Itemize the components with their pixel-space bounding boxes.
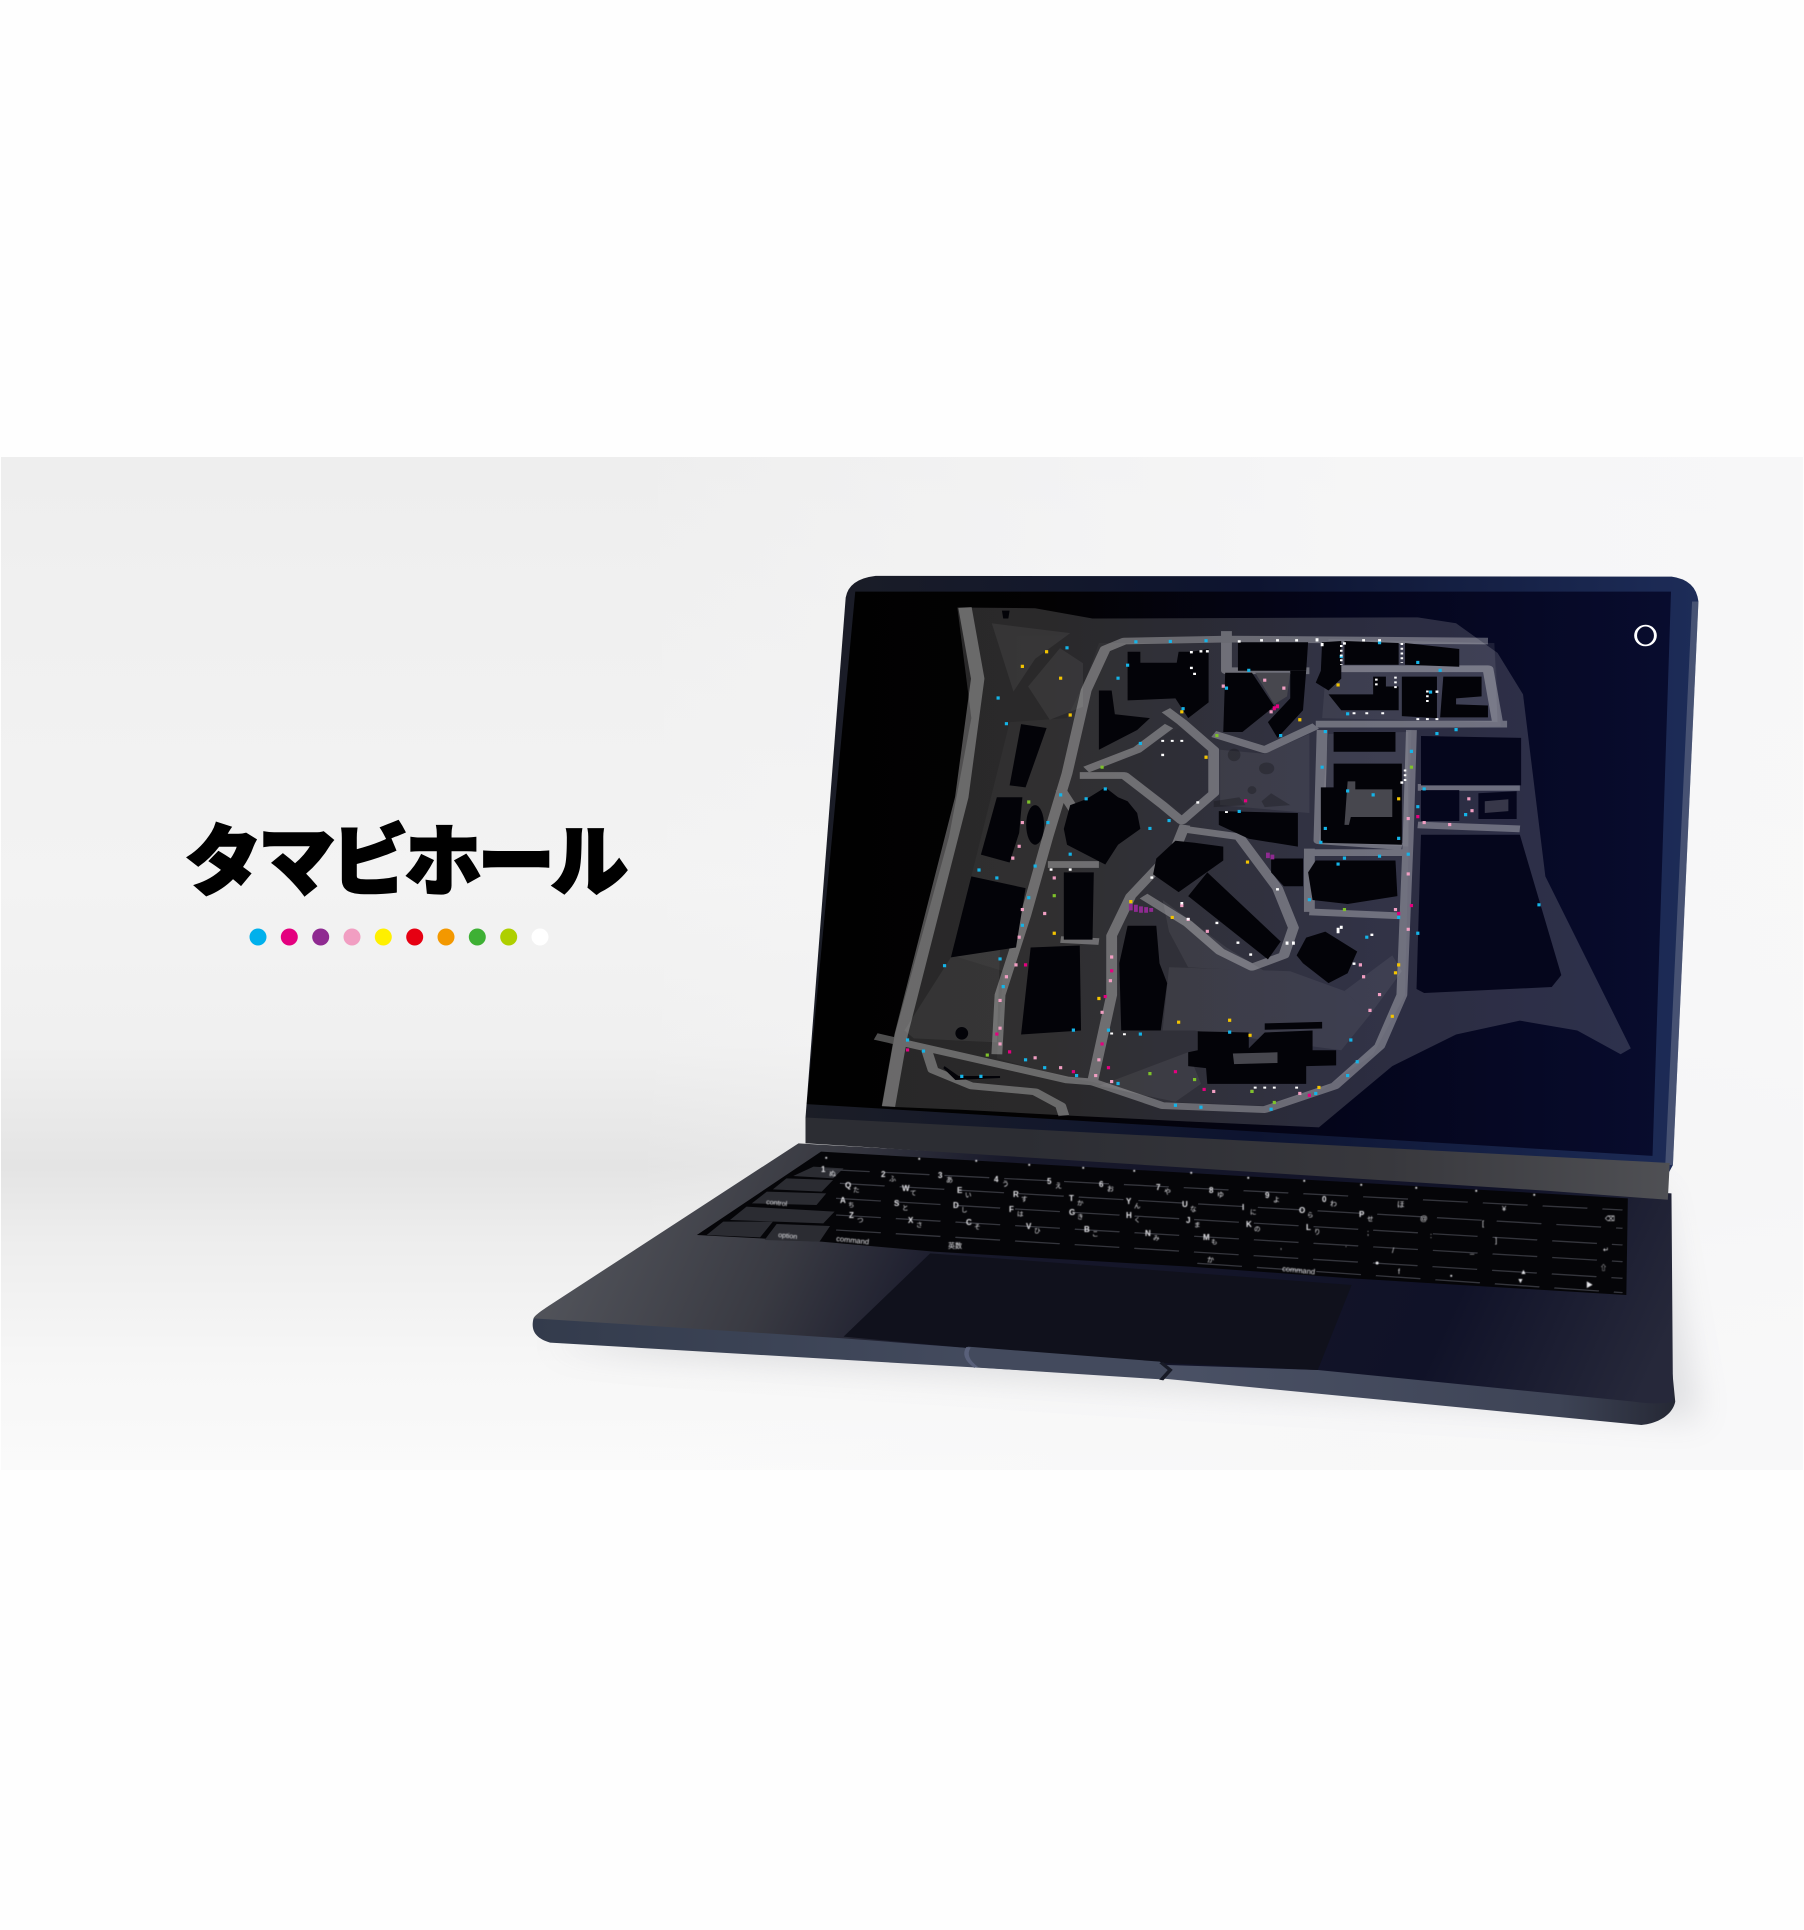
keyboard legends: 1234567890 xyxy=(821,1165,1327,1204)
keyboard legends: ちとしはきくまのり xyxy=(848,1201,1320,1236)
base deck xyxy=(534,1143,1673,1403)
keyboard legends: option xyxy=(778,1232,798,1241)
title: タマビホール xyxy=(185,820,628,906)
thumb notch xyxy=(966,1347,1169,1379)
campus map xyxy=(876,607,1631,1127)
lid outer xyxy=(806,576,1698,1177)
right side cut-outs xyxy=(1417,736,1561,993)
keyboard legends: ぬふあうえおやゆよわ xyxy=(829,1170,1337,1208)
hinge bar xyxy=(806,1118,1670,1200)
notch ends xyxy=(1161,1363,1170,1380)
keyboard legends: ASDFGHJKL xyxy=(840,1196,1311,1232)
visitor dots: magenta xyxy=(908,704,1418,1097)
keyboard legends: ▪▪▪▪▪▪▪▪▪▪▪▪▪ xyxy=(825,1155,1536,1199)
keyboard legends: ZXCVBNM xyxy=(849,1211,1210,1242)
visitor dots: yellow and orange xyxy=(1022,650,1399,1089)
plaza circles xyxy=(1214,749,1290,807)
keyboard well xyxy=(697,1152,1628,1295)
visitor dots: white xyxy=(1051,638,1437,1089)
courtyard small xyxy=(1485,799,1508,813)
screen corner ring icon xyxy=(1636,626,1655,645)
base front edge xyxy=(533,1310,1675,1425)
map ground xyxy=(882,607,1631,1127)
keyboard legends: 英数 xyxy=(948,1241,962,1250)
central oval lawn xyxy=(1105,726,1211,813)
keyboard legends: command xyxy=(836,1234,869,1246)
keyboard legends: ほ@[¥;:],./_ xyxy=(1280,1200,1507,1255)
photo background panel xyxy=(1,457,1803,1470)
left side keys xyxy=(707,1167,844,1242)
courtyards xyxy=(1233,673,1392,1064)
trackpad xyxy=(844,1253,1352,1370)
keyboard legends xyxy=(766,1155,1615,1289)
screen xyxy=(807,592,1671,1156)
visitor dots: cyan xyxy=(908,639,1539,1111)
keyboard legends: command xyxy=(1282,1264,1315,1276)
keyboard legends: QWERTYUIOP xyxy=(845,1181,1365,1219)
roads xyxy=(876,607,1520,1116)
laptop base xyxy=(533,1143,1675,1425)
keyboard legends: control xyxy=(766,1199,788,1208)
keyboard legends: つさそひこみも xyxy=(857,1217,1218,1246)
key lower edges xyxy=(825,1169,1623,1293)
visitor dots: green xyxy=(987,734,1411,1104)
lid silver edge xyxy=(1665,602,1698,1165)
visitor dots: pink xyxy=(1000,679,1472,1095)
keyboard legends: たていすかんなにらせ xyxy=(853,1186,1374,1223)
colour dots row xyxy=(250,928,548,946)
visitor dots: white columns xyxy=(1341,643,1427,781)
laptop lid xyxy=(806,576,1698,1200)
visitor dots: purple cluster xyxy=(1131,853,1272,913)
lighter lawns xyxy=(904,623,1498,1102)
buildings xyxy=(943,611,1488,1084)
campus inner zone xyxy=(952,643,1501,1106)
keyboard legends: か●f▪▲▼▶⌫↵⇧ xyxy=(1207,1215,1615,1289)
laptop shadow xyxy=(545,1190,1700,1420)
